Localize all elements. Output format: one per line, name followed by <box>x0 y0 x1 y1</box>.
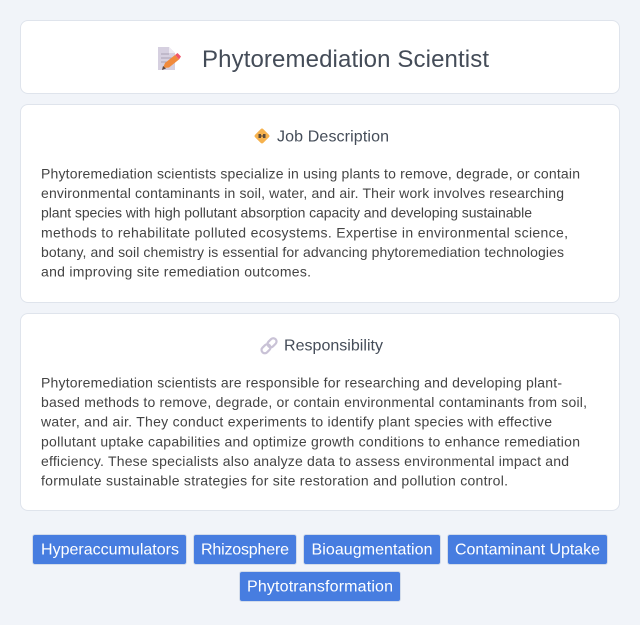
tag: Rhizosphere <box>193 534 297 565</box>
panel: job description <box>20 104 620 303</box>
title: Phytoremediation Scientist <box>202 46 489 73</box>
header card <box>20 20 620 94</box>
tag: Hyperaccumulators <box>32 534 187 565</box>
tag: Phytotransformation <box>239 571 401 602</box>
text block: job description: botany, and soil chemistry is essential for advancing phytoremediation technologies <box>41 244 564 260</box>
text block: responsibility: efficiency. These specialists also analyze data to assess environmental impact and <box>41 453 569 469</box>
tag: Phytotransformation: Phytotransformation <box>247 578 393 596</box>
tag: Hyperaccumulators: Hyperaccumulators <box>41 542 179 558</box>
tag: Bioaugmentation: Bioaugmentation <box>312 542 432 558</box>
text block: responsibility: water, and air. They conduct experiments to identify plant species with effective <box>40 414 552 430</box>
text block: job description: plant species with high pollutant absorption capacity and developing sustainable <box>41 204 532 220</box>
tag: Contaminant Uptake: Contaminant Uptake <box>455 542 600 558</box>
heading: responsibility: Responsibility <box>284 338 383 354</box>
tag: Bioaugmentation <box>303 534 441 565</box>
text block: responsibility: based methods to remove, degrade, or contain environmental contaminants from soil, <box>41 394 587 410</box>
text block: responsibility: Phytoremediation scientists are responsible for researching and developing plant- <box>41 374 562 390</box>
text block: job description: environmental contaminants in soil, water, and air. Their work involves researching <box>41 185 564 201</box>
tag: Contaminant Uptake <box>447 534 608 565</box>
tag: Rhizosphere: Rhizosphere <box>201 542 289 558</box>
text block: responsibility: pollutant uptake capabilities and optimize growth conditions to enhance remediation <box>41 434 580 450</box>
text block: responsibility: formulate sustainable strategies for site restoration and pollution control. <box>41 472 508 488</box>
text block: job description: methods to rehabilitate polluted ecosystems. Expertise in environmental science, <box>41 224 568 240</box>
text block: job description: Phytoremediation scientists specialize in using plants to remove, degrade, or contain <box>41 166 580 182</box>
heading: job description: Job Description <box>277 128 389 146</box>
text block: job description: and improving site remediation outcomes. <box>41 264 311 280</box>
panel: responsibility <box>20 313 620 511</box>
